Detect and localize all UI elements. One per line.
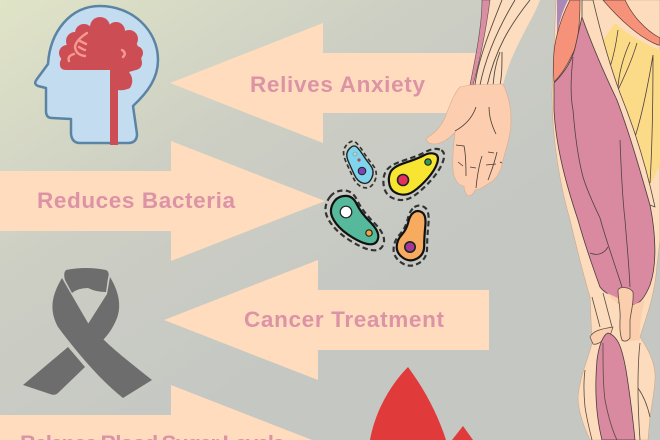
knee cap xyxy=(618,288,633,341)
arrow: balance blood sugar levels xyxy=(0,385,325,440)
brain xyxy=(59,17,143,145)
muscle separation lines xyxy=(571,30,653,287)
icon: red flame xyxy=(370,367,473,440)
thigh band xyxy=(582,0,655,207)
illustration: forearm with tendons xyxy=(470,0,540,86)
illustration: leg muscles xyxy=(552,0,660,440)
bacterium: yellow xyxy=(383,149,444,200)
muscle: yellow xyxy=(603,23,660,185)
icon: awareness ribbon xyxy=(23,268,152,398)
knee lines xyxy=(592,293,612,327)
bacterium: blue xyxy=(344,141,376,188)
ribbon right band xyxy=(88,277,119,341)
illustration: hand xyxy=(427,84,511,196)
ribbon top loop xyxy=(64,268,109,293)
arrow: relives anxiety: Relives Anxiety xyxy=(250,72,425,97)
lower leg lines xyxy=(584,343,650,440)
muscle: main pink thigh xyxy=(554,17,655,306)
muscle: purple xyxy=(557,0,568,37)
arrow: reduces bacteria xyxy=(0,141,325,261)
lower leg pink muscle xyxy=(596,333,635,440)
bacterium: orange xyxy=(394,206,429,266)
arrow: cancer treatment xyxy=(164,260,489,380)
bacterium: green xyxy=(325,190,384,250)
muscle: coral left xyxy=(553,0,580,82)
arrow: cancer treatment: Cancer Treatment xyxy=(244,307,444,332)
brain folds xyxy=(69,33,125,61)
arrow: relives anxiety xyxy=(170,23,482,143)
leg base xyxy=(552,0,660,440)
ribbon left tail xyxy=(23,347,85,395)
icon: head with brain xyxy=(35,6,158,145)
knee tissue xyxy=(607,293,645,342)
knee tendon tab xyxy=(590,327,613,344)
arrow: reduces bacteria: Reduces Bacteria xyxy=(37,188,235,213)
muscle: coral right xyxy=(603,0,660,45)
ribbon long band xyxy=(52,278,152,398)
icon: bacteria group xyxy=(325,141,444,266)
